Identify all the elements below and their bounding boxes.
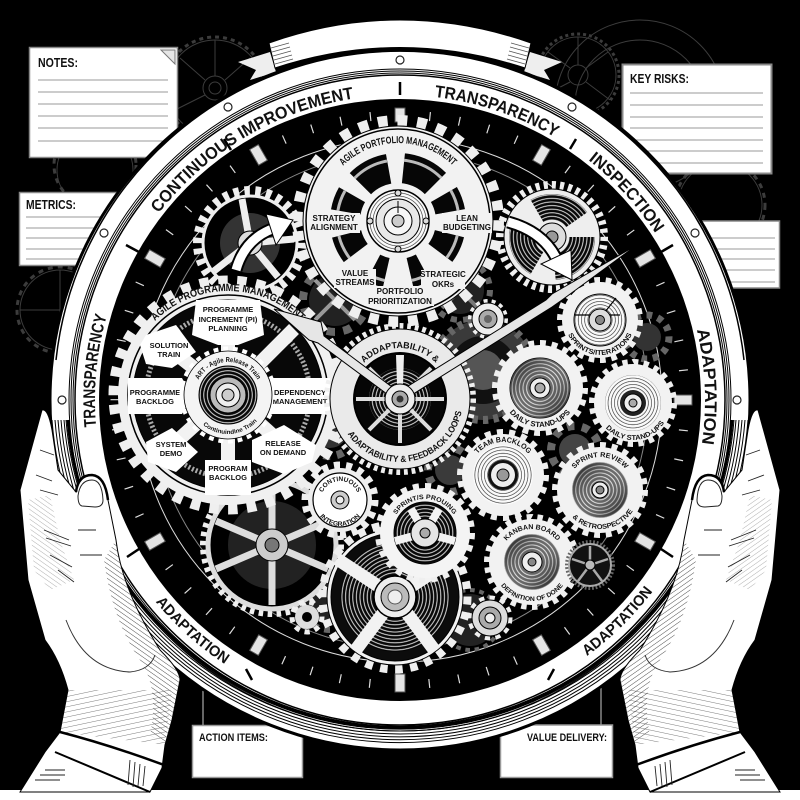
programme gear labels: ON DEMAND bbox=[260, 448, 307, 457]
ribbon banner bbox=[238, 20, 562, 80]
heading: value delivery: VALUE DELIVERY: bbox=[527, 732, 607, 744]
programme gear labels: INCREMENT (PI) bbox=[199, 315, 258, 324]
gear: portfolio management bbox=[298, 121, 498, 321]
portfolio gear labels: OKRs bbox=[432, 280, 455, 289]
ring label: adaptation bottom left: ADAPTATION bbox=[156, 598, 230, 664]
sprint planning label: SPRINT/S PROUING bbox=[393, 494, 456, 514]
gear: daily stand-ups one bbox=[492, 340, 588, 436]
panel: blank right note bbox=[660, 221, 780, 288]
heading: notes: NOTES: bbox=[38, 55, 78, 70]
clock hand: long bbox=[405, 245, 637, 396]
ring label: adaptation right: ADAPTATION bbox=[697, 330, 717, 444]
portfolio gear labels bbox=[310, 213, 492, 306]
adaptability top label: ADDAPTABILITY & bbox=[362, 342, 438, 363]
gear: small dark bbox=[567, 542, 613, 588]
daily stand-ups label: DAILY STAND-UPS bbox=[510, 409, 570, 428]
team backlog label: TEAM BACKLOG bbox=[474, 436, 531, 453]
definition of done label: DEFINITION OF DONE bbox=[501, 582, 563, 601]
gear: sprints and iterations bbox=[557, 277, 643, 363]
right hand bbox=[620, 410, 780, 792]
gear: daily stand-ups two bbox=[589, 359, 677, 447]
background mid-grey gears bbox=[300, 260, 669, 650]
programme gear labels: PROGRAMME bbox=[130, 388, 180, 397]
gear: lower left bbox=[204, 477, 340, 613]
sprint review label: SPRINT REVIEW bbox=[572, 452, 629, 468]
clock centre hub bbox=[385, 384, 415, 414]
programme gear heading: AGILE PROGRAMME MANAGEMENT bbox=[152, 284, 306, 321]
programme gear spokes and plates bbox=[128, 300, 330, 495]
retrospective label: & RETROSPECTIVE bbox=[572, 508, 633, 530]
continuous label: CONTINUOUS bbox=[319, 476, 361, 492]
programme gear labels: BACKLOG bbox=[136, 397, 174, 406]
gear: upper left bbox=[198, 191, 302, 295]
portfolio window cut-outs bbox=[337, 160, 459, 282]
programme gear labels: MANAGEMENT bbox=[273, 397, 328, 406]
gear: kanban board bbox=[484, 514, 577, 610]
background gears bbox=[17, 20, 765, 353]
heading: key risks: KEY RISKS: bbox=[630, 71, 689, 86]
programme gear labels: PROGRAMME bbox=[203, 305, 253, 314]
programme gear labels bbox=[130, 305, 328, 482]
portfolio gear heading: AGILE PORTFOLIO MANAGEMENT bbox=[340, 136, 458, 166]
gear: upper right bbox=[500, 185, 604, 289]
portfolio gear labels: STRATEGY bbox=[313, 214, 356, 223]
programme gear labels: RELEASE bbox=[265, 439, 301, 448]
programme gear labels: PROGRAM bbox=[208, 464, 248, 473]
programme gear labels: SOLUTION bbox=[150, 341, 188, 350]
portfolio gear labels: LEAN bbox=[456, 214, 478, 223]
kanban label: KANBAN BOARD bbox=[503, 524, 560, 540]
release train top label: ART - Agile Release Train bbox=[195, 357, 260, 380]
gear: programme management bbox=[114, 281, 342, 509]
arrow: to portfolio gear bbox=[236, 214, 293, 270]
gear: sprint review and retrospective bbox=[552, 442, 648, 538]
integration label: INTEGRATION bbox=[320, 514, 360, 526]
left hand bbox=[20, 410, 180, 792]
panel: action items bbox=[192, 690, 302, 778]
arrow: from portfolio gear bbox=[508, 222, 572, 280]
portfolio gear labels: BUDGETING bbox=[443, 223, 491, 232]
portfolio gear labels: ALIGNMENT bbox=[310, 223, 358, 232]
programme gear labels: DEPENDENCY bbox=[274, 388, 326, 397]
gear: sprint planning bbox=[375, 483, 475, 583]
bottom white strip bbox=[0, 790, 800, 800]
ring label: transparency left: TRANSPARENCY bbox=[83, 313, 106, 428]
gear: adaptability and feedback loops bbox=[324, 323, 476, 475]
gear: team backlog bbox=[457, 429, 549, 521]
programme gear labels: PLANNING bbox=[208, 324, 248, 333]
clock hand: short bbox=[274, 309, 396, 397]
gear: small centre right bbox=[470, 301, 506, 337]
clock outer ring bbox=[50, 50, 750, 750]
programme gear labels: DEMO bbox=[160, 449, 182, 458]
ring label: adaptation bottom right: ADAPTATION bbox=[584, 586, 652, 656]
ring tick marks bbox=[126, 82, 673, 680]
panel: value delivery bbox=[500, 590, 612, 778]
ring label: transparency top: TRANSPARENCY bbox=[436, 85, 560, 136]
gear: large lower bbox=[323, 525, 467, 669]
programme gear labels: TRAIN bbox=[158, 350, 180, 359]
portfolio gear labels: VALUE bbox=[342, 269, 369, 278]
gear: agile release train bbox=[180, 346, 276, 444]
panel: key risks bbox=[622, 64, 772, 174]
sprints label: SPRINTS/ITERATIONS bbox=[568, 333, 632, 355]
gear: continuous integration bbox=[302, 462, 378, 538]
portfolio gear labels: PRIORITIZATION bbox=[368, 297, 432, 306]
feedback loops bottom label: ADAPTABILITY & FEEDBACK LOOPS bbox=[348, 411, 462, 462]
panel: metrics bbox=[20, 192, 150, 266]
portfolio gear labels: STRATEGIC bbox=[420, 270, 466, 279]
portfolio gear labels: PORTFOLIO bbox=[377, 287, 423, 296]
heading: metrics: METRICS: bbox=[26, 197, 76, 212]
portfolio gear labels: STREAMS bbox=[335, 278, 375, 287]
release train bottom label: Continuindine Train bbox=[204, 420, 257, 434]
ring label: continuous improvement: CONTINUOUS IMPROVEMENT bbox=[152, 87, 352, 211]
ring label: inspection: INSPECTION bbox=[589, 152, 664, 232]
heading: action items: ACTION ITEMS: bbox=[199, 732, 268, 744]
daily stand-ups label: DAILY STAND-UPS bbox=[606, 420, 664, 440]
programme gear labels: SYSTEM bbox=[156, 440, 186, 449]
dial markings bbox=[115, 108, 692, 692]
gear: small lower right bbox=[470, 598, 510, 638]
ring screws bbox=[58, 56, 741, 404]
panel: notes bbox=[30, 48, 178, 158]
programme gear labels: BACKLOG bbox=[209, 473, 247, 482]
gear: small lower left bbox=[292, 602, 322, 632]
